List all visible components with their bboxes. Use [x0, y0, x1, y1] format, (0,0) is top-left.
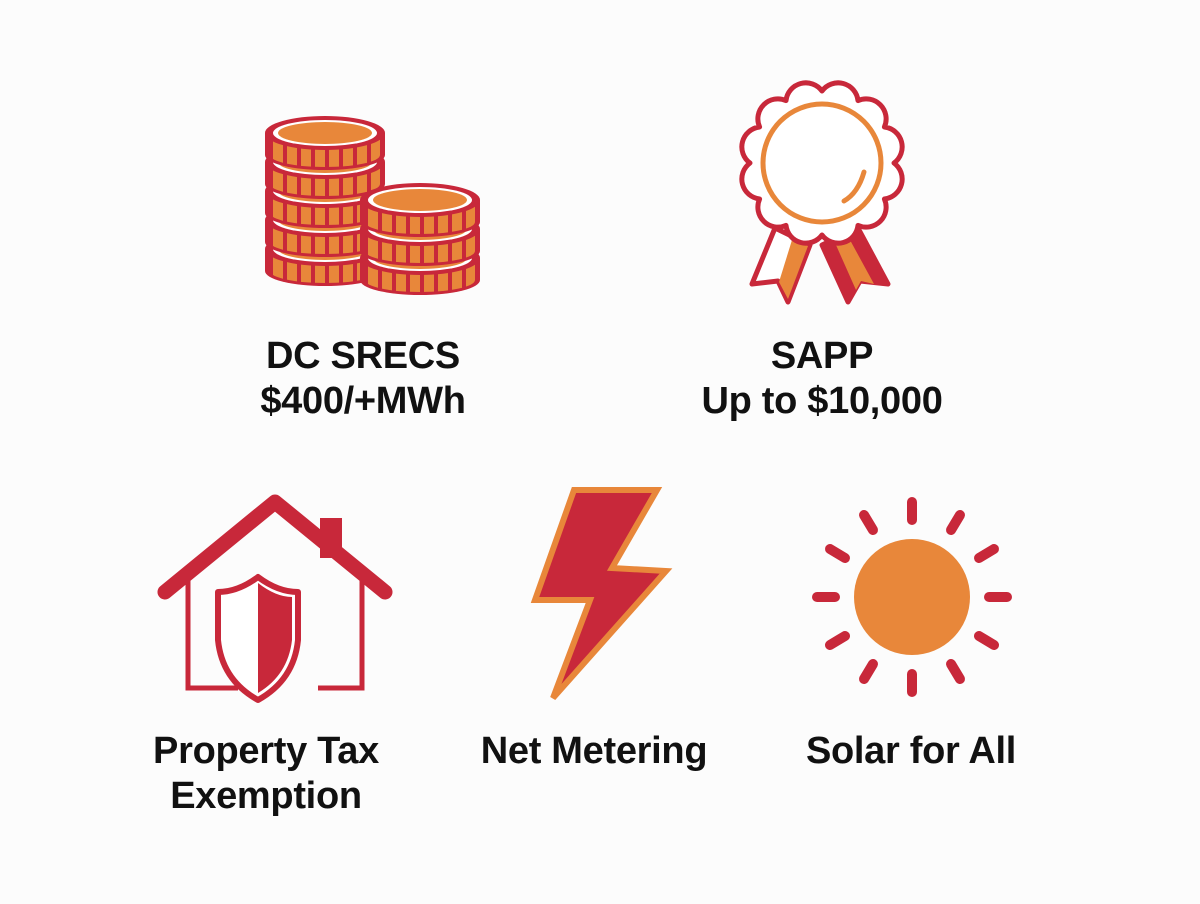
label: SAPP: [701, 335, 943, 422]
label: DC SRECS: $400/+MWh: [260, 380, 466, 422]
label: Solar for All: Solar for All: [806, 730, 1016, 772]
icon: lightning bolt: [535, 490, 666, 698]
label: DC SRECS: DC SRECS: [266, 335, 460, 377]
icon: sun: [817, 502, 1007, 692]
label: SAPP: SAPP: [771, 335, 873, 377]
label: Net Metering: Net Metering: [481, 730, 707, 772]
icon: award ribbon: [742, 83, 902, 302]
label: SAPP: Up to $10,000: [701, 380, 943, 422]
icon: coin stacks: [265, 116, 480, 295]
label: Property Tax Exemption: Property Tax: [153, 730, 379, 772]
icon: house with shield: [165, 502, 385, 700]
label: Property Tax Exemption: [153, 730, 379, 817]
label: DC SRECS: [260, 335, 466, 422]
label: Property Tax Exemption: Exemption: [170, 775, 362, 817]
